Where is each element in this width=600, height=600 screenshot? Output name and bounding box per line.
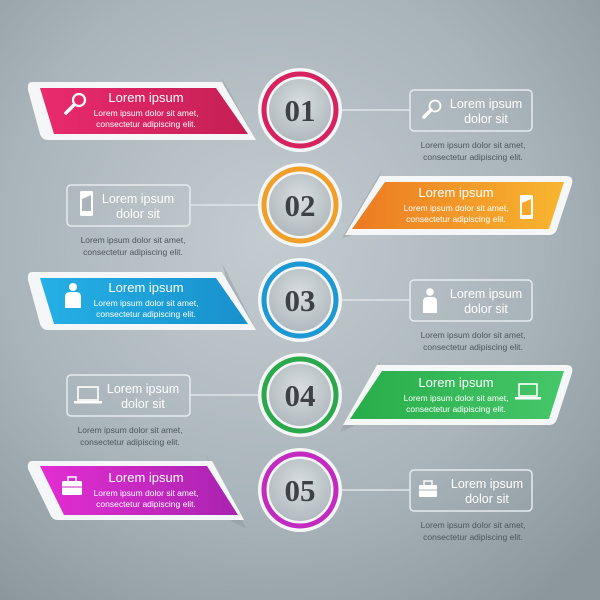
banner: left blue: Lorem ipsum dolor sit amet, <box>94 298 198 308</box>
description <box>78 425 182 447</box>
icon: briefcase <box>62 477 82 495</box>
box: left outline: Lorem ipsum <box>107 382 179 396</box>
description: Lorem ipsum dolor sit amet, <box>421 520 525 530</box>
description: Lorem ipsum dolor sit amet, <box>421 330 525 340</box>
description: Lorem ipsum dolor sit amet, <box>78 425 182 435</box>
banner: left blue <box>28 263 256 330</box>
banner: left purple: consectetur adipiscing elit. <box>96 499 196 509</box>
description: consectetur adipiscing elit. <box>423 342 523 352</box>
description: Lorem ipsum dolor sit amet, <box>421 140 525 150</box>
box: left outline: Lorem ipsum <box>102 192 174 206</box>
box: right outline: Lorem ipsum <box>451 477 523 491</box>
description: Lorem ipsum dolor sit amet, <box>81 235 185 245</box>
row 4 <box>67 353 572 447</box>
description <box>81 235 185 257</box>
banner: left blue: consectetur adipiscing elit. <box>96 309 196 319</box>
banner: right green: consectetur adipiscing elit. <box>406 404 506 414</box>
icon: person <box>65 283 81 308</box>
box: right outline: Lorem ipsum <box>450 97 522 111</box>
box: right outline <box>410 90 532 131</box>
banner: right orange: consectetur adipiscing elit. <box>406 214 506 224</box>
box: left outline: dolor sit <box>121 397 165 411</box>
banner: left purple: Lorem ipsum <box>108 470 184 485</box>
banner: right orange: Lorem ipsum dolor sit amet, <box>404 203 508 213</box>
banner: right orange <box>342 170 572 238</box>
box: right outline <box>410 280 532 321</box>
box: right outline: Lorem ipsum <box>450 287 522 301</box>
box: left outline <box>67 185 190 226</box>
circle 04 <box>258 353 342 437</box>
box: right outline: dolor sit <box>464 302 508 316</box>
row 5 <box>28 448 532 542</box>
icon: phone <box>520 195 533 219</box>
banner: left purple: Lorem ipsum dolor sit amet, <box>94 488 198 498</box>
banner: right green: Lorem ipsum <box>418 375 494 390</box>
box: right outline: dolor sit <box>465 492 509 506</box>
banner: left pink: Lorem ipsum dolor sit amet, <box>94 108 198 118</box>
circle 05 <box>258 448 342 532</box>
circle 03: 03 <box>284 283 316 318</box>
banner: left purple <box>28 453 246 528</box>
icon: magnifier <box>66 94 85 113</box>
description: consectetur adipiscing elit. <box>423 532 523 542</box>
description <box>421 330 525 352</box>
banner: right green: Lorem ipsum dolor sit amet, <box>404 393 508 403</box>
description: consectetur adipiscing elit. <box>80 437 180 447</box>
banner: right green <box>340 358 572 432</box>
banner: left pink: consectetur adipiscing elit. <box>96 119 196 129</box>
circle 02 <box>258 163 342 247</box>
box: left outline <box>67 375 190 416</box>
row 1 <box>28 68 532 162</box>
description <box>421 140 525 162</box>
row 3 <box>28 258 532 352</box>
banner: right orange: Lorem ipsum <box>418 185 494 200</box>
box: left outline: dolor sit <box>116 207 160 221</box>
banner: left pink: Lorem ipsum <box>108 90 184 105</box>
description: consectetur adipiscing elit. <box>83 247 183 257</box>
circle 01: 01 <box>284 93 316 128</box>
circle 05: 05 <box>284 473 316 508</box>
box: right outline: dolor sit <box>464 112 508 126</box>
circle 03 <box>258 258 342 342</box>
description <box>421 520 525 542</box>
circle 02: 02 <box>284 188 316 223</box>
description: consectetur adipiscing elit. <box>423 152 523 162</box>
banner: left pink <box>28 78 256 140</box>
circle 04: 04 <box>284 378 316 413</box>
row 2 <box>67 163 572 257</box>
circle 01 <box>258 68 342 152</box>
box: right outline <box>410 470 532 511</box>
banner: left blue: Lorem ipsum <box>108 280 184 295</box>
icon: laptop <box>515 384 541 400</box>
